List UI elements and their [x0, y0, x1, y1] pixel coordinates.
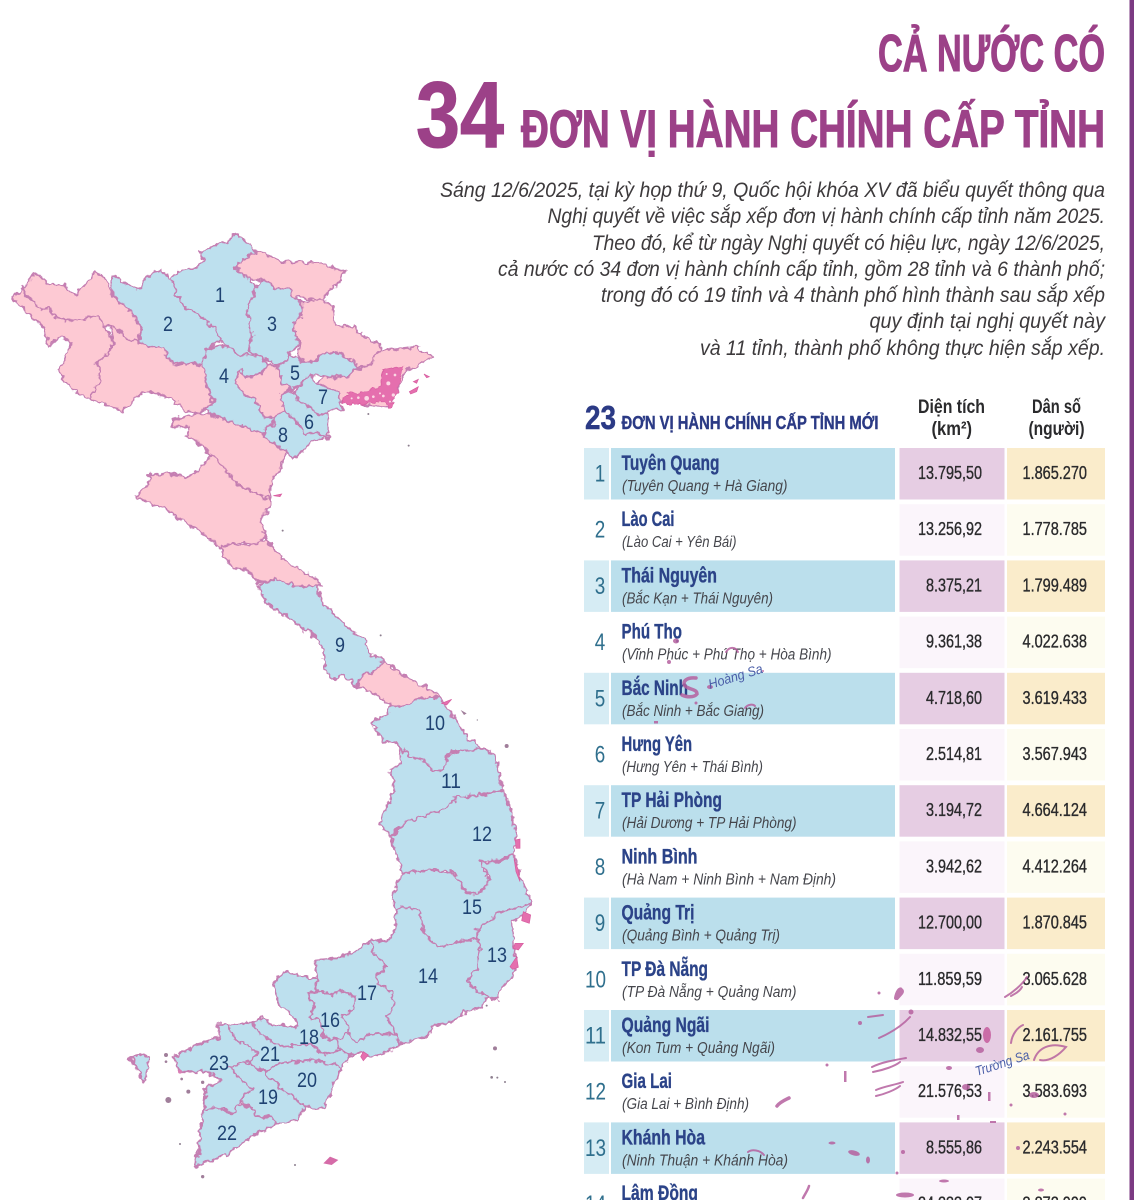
row 5: Bắc Ninh: [622, 676, 688, 700]
region 3: Thái Nguyên: 3: [267, 313, 277, 336]
row 3: Thái Nguyên: [622, 564, 717, 587]
region 9: Quảng Trị: [258, 578, 383, 687]
row 9: Quảng Trị: [622, 902, 694, 925]
map of Vietnam: [12, 234, 532, 1178]
region 16: TP Hồ Chí Minh: 16: [320, 1009, 340, 1032]
row 13: [584, 1122, 1105, 1174]
row 12: [585, 1066, 1105, 1118]
row 9: 9: [595, 910, 605, 937]
region 5: Bắc Ninh: [278, 352, 358, 390]
table: [584, 448, 1105, 1200]
region 20: Vĩnh Long: 20: [297, 1069, 317, 1092]
table heading: [585, 399, 878, 436]
title: [416, 24, 1105, 167]
row 9: [584, 898, 1105, 949]
row 1: 1.865.270: [1022, 463, 1087, 483]
region 4: Phú Thọ: [203, 345, 273, 433]
row 8: 8: [595, 854, 605, 881]
row 13: 8.555,86: [926, 1137, 982, 1157]
row 8: 3.942,62: [926, 856, 982, 876]
region 23: An Giang: [173, 1025, 258, 1113]
row 8: Ninh Bình: [622, 845, 698, 868]
row 6: 6: [595, 742, 605, 768]
region 14: Lâm Đồng: 14: [418, 965, 438, 988]
region: Hà Tĩnh: [222, 540, 323, 587]
row 11: 2.161.755: [1022, 1025, 1087, 1045]
row 1: 1: [595, 460, 605, 488]
region 13: Khánh Hòa: [468, 903, 532, 1000]
intro paragraph: [440, 179, 1106, 360]
label: Hoàng Sa: Hoàng Sa: [706, 661, 765, 692]
region 8: Ninh Bình: [263, 410, 328, 460]
region: Lai Châu: [23, 272, 142, 342]
region 14: Lâm Đồng: [372, 908, 488, 1045]
region 22: Cà Mau: [195, 1103, 277, 1167]
row 3: (Bắc Kạn + Thái Nguyên): [622, 590, 773, 607]
row 5: 4.718,60: [926, 688, 982, 708]
row 3: 1.799.489: [1022, 575, 1087, 595]
row 4: (Vĩnh Phúc + Phú Thọ + Hòa Bình): [622, 647, 832, 664]
region 2: Lào Cai: [112, 270, 220, 366]
row 4: [595, 617, 1105, 668]
row 2: 1.778.785: [1022, 519, 1087, 539]
right edge strip: [1130, 0, 1134, 1200]
region 23: An Giang: 23: [209, 1052, 229, 1075]
row 4: Phú Thọ: [622, 621, 682, 644]
row 5: [584, 673, 1105, 724]
row 13: Khánh Hòa: [622, 1126, 705, 1149]
row 10: [585, 954, 1105, 1005]
row 4: 4: [595, 629, 605, 656]
region 16: TP Hồ Chí Minh: 18: [299, 1026, 319, 1049]
row 6: 2.514,81: [926, 744, 982, 764]
region: Huế: [357, 662, 440, 707]
small islands: south coast: [164, 858, 531, 1178]
row 12: 3.583.693: [1022, 1081, 1087, 1101]
label: Trường Sa: Trường Sa: [973, 1047, 1032, 1079]
region 21: Đồng Tháp: 21: [260, 1043, 280, 1066]
small islands: central coast: [380, 634, 520, 848]
Hoàng Sa archipelago: [654, 638, 765, 724]
region: Cao Bằng: [235, 252, 345, 300]
row 1: [584, 448, 1105, 500]
island: Phú Quốc: [130, 1053, 148, 1084]
region 7: Hải Phòng: 7: [318, 386, 328, 409]
row 11: 11: [585, 1022, 606, 1050]
region 1: Tuyên Quang: 1: [215, 284, 225, 307]
region 4: Phú Thọ: 4: [219, 365, 229, 388]
region 15: Đắk Lắk: 15: [462, 896, 482, 919]
row 9: 1.870.845: [1022, 913, 1087, 933]
row 7: (Hải Dương + TP Hải Phòng): [622, 815, 796, 832]
region: Hà Nội: [235, 365, 292, 417]
row 7: 3.194,72: [926, 800, 982, 820]
row 10: 11.859,59: [918, 969, 982, 989]
region 8: Ninh Bình: 8: [278, 424, 288, 447]
region 17: Đồng Nai: 17: [357, 982, 377, 1005]
region 7: Hải Phòng: [295, 375, 343, 415]
region: Lạng Sơn: [293, 300, 382, 368]
column header: population: (người): [1028, 418, 1084, 440]
region 3: Thái Nguyên: [247, 280, 302, 365]
region: Quảng Ninh: [317, 347, 432, 407]
region 13: Khánh Hòa: 13: [487, 944, 507, 967]
column header: area: (km²): [932, 418, 972, 440]
column header: area: [918, 396, 985, 440]
row 6: 3.567.943: [1022, 744, 1087, 764]
row 11: 14.832,55: [918, 1025, 982, 1045]
row 12: 12: [585, 1079, 606, 1106]
row 10: TP Đà Nẵng: [622, 957, 708, 981]
region 11: Quảng Ngãi: 11: [441, 770, 461, 793]
table heading: 23: [585, 399, 616, 436]
region: Thanh Hóa: [172, 413, 287, 500]
region: Nghệ An: [135, 455, 270, 548]
row 2: (Lào Cai + Yên Bái): [622, 534, 736, 551]
intro paragraph: và 11 tỉnh, thành phố không thực hiện sắp xếp.: [700, 337, 1105, 360]
row 3: 8.375,21: [926, 575, 982, 595]
row 11: [584, 1010, 1105, 1062]
region 21: Đồng Tháp: [227, 1022, 350, 1072]
region 19: Cần Thơ: 19: [258, 1086, 278, 1109]
intro paragraph: quy định tại nghị quyết này: [870, 310, 1106, 333]
region 12: Gia Lai: [390, 790, 517, 893]
row 2: 2: [595, 517, 605, 544]
row 12: (Gia Lai + Bình Định): [622, 1096, 749, 1113]
row 4: 9.361,38: [926, 632, 982, 652]
row 6: [595, 729, 1105, 780]
row 5: 5: [595, 685, 605, 712]
row 8: [595, 841, 1105, 893]
row 12: 21.576,53: [918, 1081, 982, 1101]
row 7: 4.664.124: [1022, 800, 1087, 820]
column header: population: Dân số: [1032, 396, 1081, 418]
row 11: (Kon Tum + Quảng Ngãi): [622, 1040, 775, 1057]
region 19: Cần Thơ: [230, 1062, 305, 1125]
title number 34: 34: [416, 62, 504, 167]
row 14: [585, 1179, 1105, 1200]
table header: [585, 396, 1084, 440]
region: Điện Biên: [12, 290, 113, 398]
table heading: ĐƠN VỊ HÀNH CHÍNH CẤP TỈNH MỚI: [622, 412, 878, 433]
row 9: 12.700,00: [918, 913, 982, 933]
row 12: Gia Lai: [622, 1070, 672, 1093]
row 3: [584, 560, 1105, 612]
region 12: Gia Lai: 12: [472, 823, 492, 846]
region 22: Cà Mau: 22: [217, 1122, 237, 1145]
row 7: 7: [595, 798, 605, 825]
row 7: TP Hải Phòng: [622, 789, 722, 812]
row 1: (Tuyên Quang + Hà Giang): [622, 478, 788, 495]
region 17: Đồng Nai: [315, 940, 397, 1043]
region 18: Tây Ninh: [252, 972, 340, 1055]
row 10: 3.065.628: [1022, 969, 1087, 989]
row 10: 10: [585, 966, 606, 993]
row 8: 4.412.264: [1022, 856, 1087, 876]
region: Sơn La: [88, 325, 213, 415]
row 4: 4.022.638: [1022, 632, 1087, 652]
intro paragraph: trong đó có 19 tỉnh và 4 thành phố hình thành sau sắp xếp: [601, 284, 1105, 307]
row 13: 13: [585, 1135, 606, 1162]
row 1: 13.795,50: [918, 463, 982, 483]
row 6: (Hưng Yên + Thái Bình): [622, 759, 763, 776]
row 13: 2.243.554: [1022, 1137, 1087, 1157]
region 11: Quảng Ngãi: [380, 747, 503, 835]
region 10: TP Đà Nẵng: 10: [425, 712, 445, 735]
row 9: (Quảng Bình + Quảng Trị): [622, 928, 780, 945]
row 2: Lào Cai: [622, 508, 674, 531]
region 9: Quảng Trị: 9: [335, 634, 345, 657]
Trường Sa archipelago: [748, 977, 1066, 1198]
region 5: Bắc Ninh: 5: [290, 362, 300, 385]
row 2: [595, 504, 1105, 556]
row 10: (TP Đà Nẵng + Quảng Nam): [622, 984, 796, 1001]
row 6: Hưng Yên: [622, 733, 692, 756]
row 5: (Bắc Ninh + Bắc Giang): [622, 703, 764, 720]
region 2: Lào Cai: 2: [163, 313, 173, 336]
region 1: Tuyên Quang: [172, 234, 255, 356]
column header: area: Diện tích: [918, 396, 985, 418]
region 6: Hưng Yên: [280, 392, 328, 438]
row 3: 3: [595, 573, 605, 600]
column header: population: [1028, 396, 1084, 440]
region 6: Hưng Yên: 6: [304, 411, 314, 434]
row 5: 3.619.433: [1022, 688, 1087, 708]
region 10: TP Đà Nẵng: [372, 697, 483, 772]
region 16: TP Hồ Chí Minh: [299, 990, 398, 1057]
islands: Quảng Ninh: [273, 367, 429, 532]
row 2: 13.256,92: [918, 519, 982, 539]
row 1: Tuyên Quang: [622, 452, 720, 475]
region 15: Đắk Lắk: [392, 853, 532, 947]
row 11: Quảng Ngãi: [622, 1014, 710, 1037]
row 7: [584, 785, 1105, 837]
row 13: (Ninh Thuận + Khánh Hòa): [622, 1152, 788, 1169]
row 8: (Hà Nam + Ninh Bình + Nam Định): [622, 871, 836, 888]
region 20: Vĩnh Long: [263, 1060, 342, 1108]
